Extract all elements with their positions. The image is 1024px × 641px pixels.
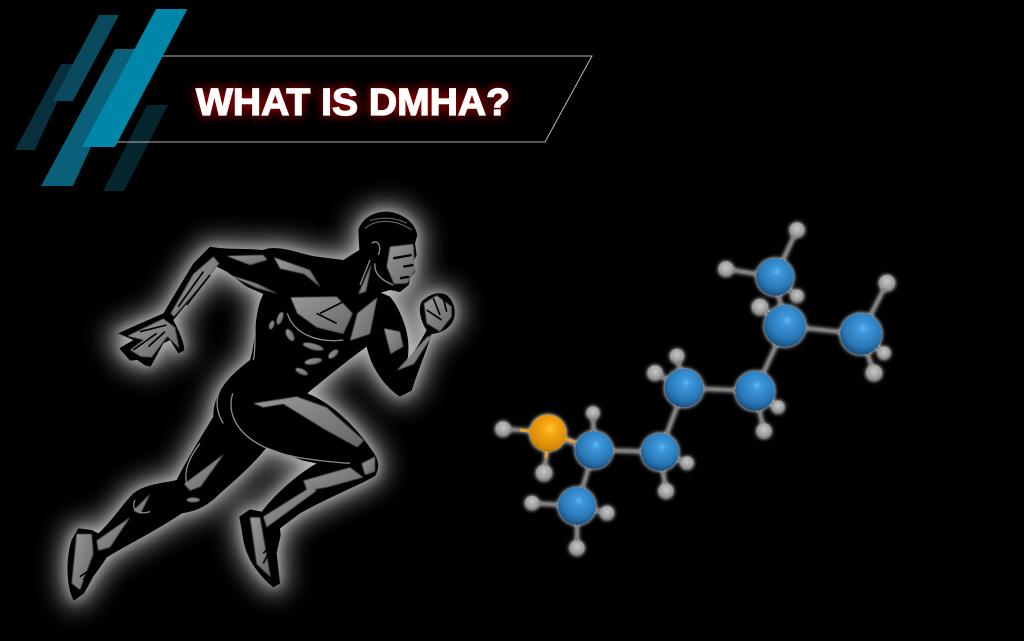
nitrogen atom [530,414,566,452]
molecule bonds [503,230,887,548]
title: WHAT IS DMHA? [196,82,510,124]
athlete contour lines [134,218,412,513]
amine N-H bonds [520,430,575,458]
banner: bright stripe [82,9,188,147]
illustration: DMHA ball-and-stick molecule [496,222,895,556]
athlete inner glow [67,212,455,601]
title: WHAT IS DMHA? [196,82,510,124]
athlete silhouette [67,212,455,601]
title frame [115,56,592,142]
athlete outer glow [67,212,455,601]
athlete line details [80,255,447,580]
athlete muscle highlights [72,244,452,590]
illustration: sprinting athlete [67,212,455,601]
carbon atoms [558,258,882,525]
hydrogen atoms [496,222,895,556]
banner: decorative slanted stripes [15,15,168,191]
